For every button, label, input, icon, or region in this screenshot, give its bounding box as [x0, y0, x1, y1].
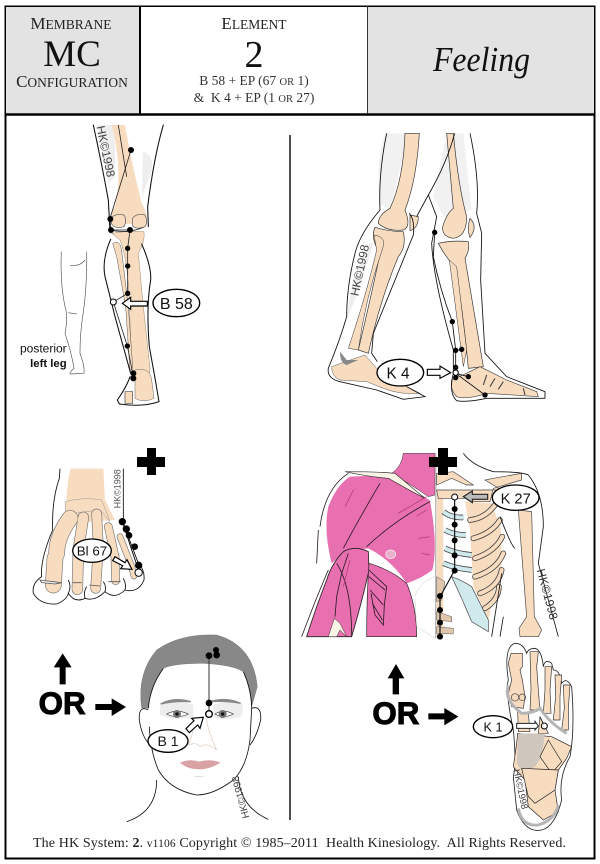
- right arrow: [95, 698, 126, 716]
- K 27 point: [452, 494, 458, 500]
- header: element cell: 2: [244, 34, 264, 76]
- K 4 label: K 4: [386, 366, 410, 383]
- OR word: OR: [39, 686, 86, 721]
- small leg icon: [61, 252, 87, 374]
- Bl 67 label: Bl 67: [77, 544, 107, 559]
- header: membrane cell: CONFIGURATION: [16, 72, 128, 91]
- copyright: HK©1998: [93, 124, 118, 179]
- K 4 label: [377, 359, 424, 386]
- posterior left leg caption: left leg: [30, 358, 67, 370]
- B 58 arrow: [122, 297, 147, 309]
- K 1 point: [541, 723, 547, 729]
- header: element cell: [141, 7, 367, 113]
- K 27 label: [492, 485, 539, 510]
- OR word: OR: [372, 696, 419, 731]
- copyright: HK©1998: [534, 567, 561, 621]
- B 1 arrow: [186, 717, 203, 733]
- K 4 arrow: [427, 366, 451, 378]
- plus sign left: [137, 448, 165, 475]
- up arrow: [388, 664, 404, 694]
- posterior left leg caption: posterior: [20, 342, 67, 356]
- B 1 point: [206, 711, 212, 717]
- header: membrane cell: MEMBRANE: [30, 14, 112, 33]
- copyright: HK©1998: [348, 243, 372, 297]
- B 58 label: [153, 289, 200, 317]
- illustration: sole of foot with K 1: [372, 643, 573, 830]
- copyright: HK©1998: [511, 768, 530, 810]
- header: element cell: B 58 + EP (67 OR 1): [199, 73, 309, 88]
- illustration: face with B 1: [39, 635, 268, 822]
- K 1 label: [473, 716, 513, 738]
- header: feeling cell: Feeling: [432, 40, 530, 79]
- illustration: posterior left leg with B 58: [20, 124, 200, 405]
- header: element cell: & K 4 + EP (1 OR 27): [194, 90, 314, 105]
- K 27 arrow: [463, 491, 488, 503]
- footer copyright line: The HK System: 2. v1106 Copyright © 1985–2011 Health Kinesiology. All Rights Reserved.: [33, 836, 566, 851]
- copyright: HK©1998: [113, 469, 123, 508]
- K 27 label: K 27: [501, 491, 531, 507]
- up arrow: [54, 653, 72, 684]
- K 4 point: [453, 370, 458, 375]
- Bl 67 arrow: [113, 557, 132, 569]
- illustration: chest muscles with K 27: [302, 453, 561, 640]
- header: feeling cell: [368, 7, 594, 113]
- plus sign right: [429, 448, 457, 475]
- Bl 67 point: [135, 569, 142, 576]
- posterior left leg caption: [20, 342, 67, 370]
- header: element cell: ELEMENT: [221, 14, 287, 33]
- B 58 point: [110, 299, 116, 305]
- illustration: side legs with K 4: [328, 133, 545, 401]
- header: membrane cell: [6, 7, 139, 113]
- header: membrane cell: MC: [43, 34, 101, 75]
- B 1 label: B 1: [157, 733, 179, 749]
- illustration: foot with Bl 67: [33, 469, 144, 604]
- copyright: HK©1998: [230, 774, 252, 819]
- right arrow: [428, 708, 458, 725]
- K 1 label: K 1: [483, 720, 502, 734]
- B 1 label: [148, 730, 188, 752]
- B 58 label: B 58: [160, 296, 193, 313]
